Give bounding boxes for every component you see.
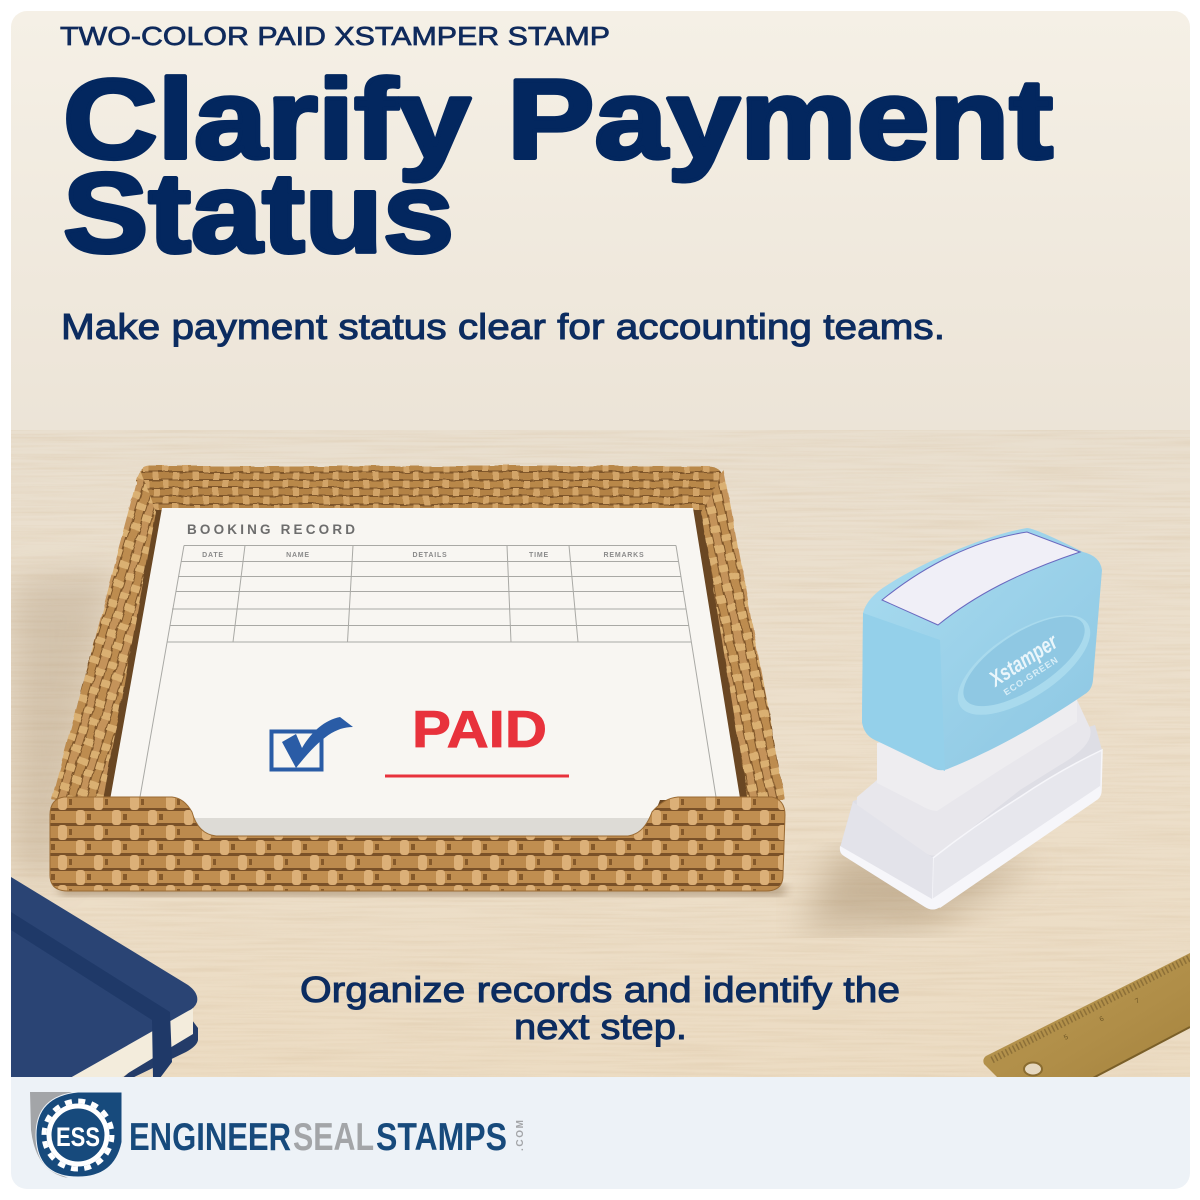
- sheet heading: BOOKING RECORD: [187, 522, 355, 537]
- stamp base left wall: [840, 838, 933, 899]
- logo wordmark: ENGINEER: [129, 1116, 291, 1159]
- tray left rim: [52, 470, 156, 800]
- footer bar: [11, 1077, 1190, 1189]
- brass ruler: 5: [1063, 1034, 1070, 1042]
- stamp base lip: [840, 786, 1101, 910]
- small eyebrow heading: TWO-COLOR PAID XSTAMPER STAMP: [60, 21, 610, 51]
- PAID stamp impression: PAID: [412, 701, 547, 759]
- navy notebook: [11, 877, 198, 1080]
- subtitle: Make payment status clear for accounting teams.: [61, 306, 945, 347]
- table column headers: DETAILS: [412, 552, 448, 559]
- table column headers: REMARKS: [604, 552, 644, 559]
- logo wordmark: STAMPS: [376, 1116, 507, 1159]
- notebook pages: [66, 1008, 193, 1078]
- brass ruler: 7: [1134, 997, 1141, 1005]
- tray front rim with notch: [50, 797, 785, 891]
- stamp white label: [882, 532, 1080, 625]
- wicker tray: [50, 466, 785, 891]
- PAID stamp impression: [385, 710, 569, 778]
- logo badge: [30, 1092, 122, 1178]
- logo wordmark: [129, 1116, 507, 1159]
- logo wordmark: SEAL: [293, 1116, 374, 1159]
- tray back rim: [136, 466, 730, 510]
- tray right rim: [701, 470, 785, 800]
- paper stack: [110, 508, 740, 838]
- stamp oval logo: ECO-GREEN: [1002, 654, 1060, 697]
- logo badge: ESS: [56, 1122, 100, 1152]
- stamp oval logo: Xstamper: [983, 628, 1063, 692]
- brass ruler: [983, 953, 1190, 1078]
- stamp side shading: [862, 613, 945, 771]
- bottom caption: next step.: [514, 1006, 687, 1047]
- tray shadow: [11, 570, 785, 896]
- main title: [63, 56, 1053, 276]
- tray inner floor: [104, 510, 747, 806]
- main title: Clarify Payment: [63, 56, 1053, 182]
- logo: Engineer Seal Stamps: [30, 1092, 526, 1178]
- stamp base front wall: [932, 750, 1102, 907]
- table column headers: TIME: [529, 552, 549, 559]
- stamp oval logo: [958, 615, 1090, 715]
- stamp blue handle: [862, 528, 1102, 770]
- brass ruler: 6: [1099, 1016, 1105, 1024]
- stamp inner block: [857, 700, 1091, 856]
- wall background: [11, 11, 1190, 431]
- stamp neck: [877, 700, 1077, 780]
- main title: Status: [63, 150, 454, 276]
- ruled table: [140, 546, 716, 797]
- booking record sheet: [110, 508, 740, 838]
- bottom caption: [300, 969, 900, 1047]
- table column headers: NAME: [286, 552, 310, 559]
- Xstamper stamp: [840, 528, 1106, 910]
- icon: blue check box stamp: [272, 717, 353, 770]
- table column headers: [202, 552, 644, 557]
- stamp base back: [840, 725, 1102, 910]
- notebook cover: [11, 877, 197, 1078]
- wooden desk surface: [11, 430, 1190, 1080]
- notebook elastic strap: [11, 912, 172, 1078]
- bottom caption: Organize records and identify the: [300, 969, 900, 1010]
- ruler tick marks: [992, 958, 1190, 1060]
- table column headers: DATE: [202, 552, 224, 559]
- ruler hole: [1024, 1062, 1042, 1076]
- notebook back cover: [124, 1021, 198, 1077]
- logo .com: .COM: [515, 1120, 526, 1151]
- stamp shadow: [800, 850, 1040, 930]
